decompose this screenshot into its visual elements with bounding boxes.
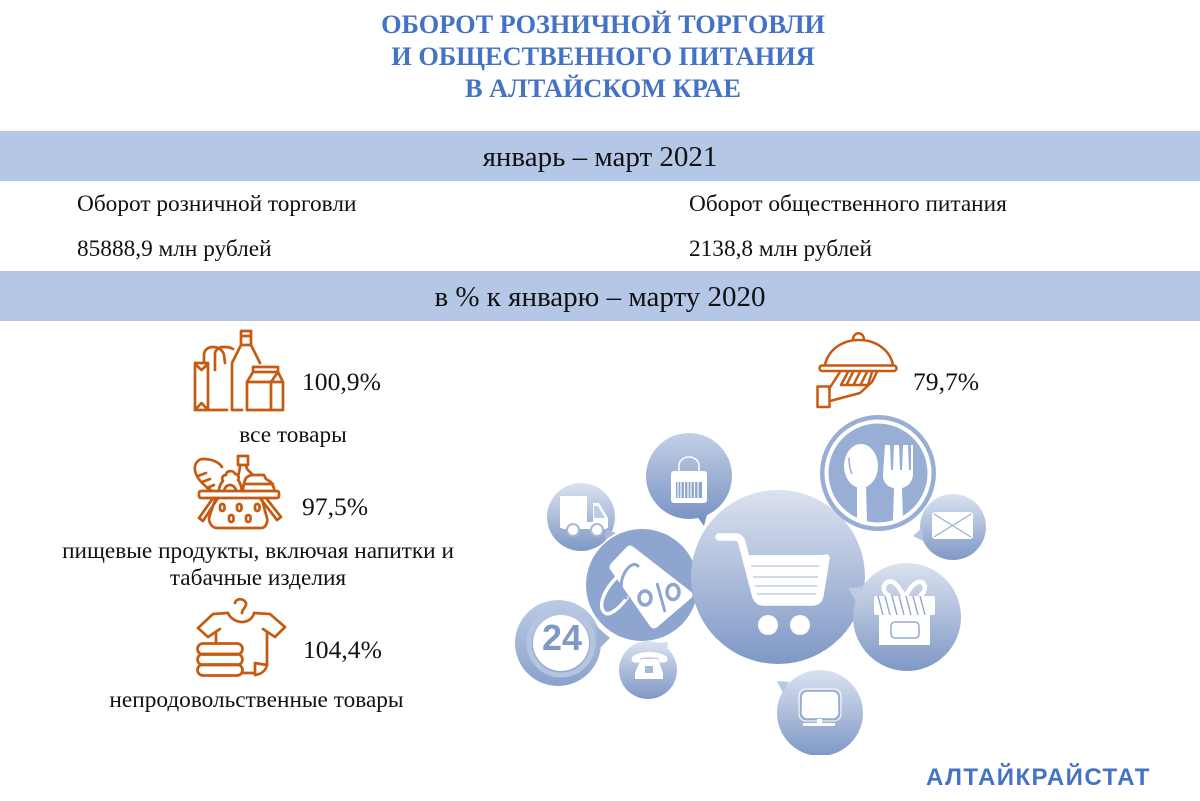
bubble: spoon and fork bbox=[820, 415, 936, 531]
bubble: gift box bbox=[848, 563, 961, 671]
text: value catering: 79,7% bbox=[913, 367, 979, 396]
bubble: 24 hours bbox=[515, 600, 610, 686]
title: В АЛТАЙСКОМ КРАЕ bbox=[465, 74, 741, 103]
text: retail label: Оборот розничной торговли bbox=[77, 191, 356, 217]
title bbox=[381, 10, 825, 103]
text: retail value: 85888,9 млн рублей bbox=[77, 236, 272, 262]
text: source: АЛТАЙКРАЙСТАТ bbox=[926, 764, 1151, 791]
bubble: envelope bbox=[913, 494, 986, 560]
text: value non-food: 104,4% bbox=[303, 635, 382, 664]
bubble: 24 hours: 24 bbox=[542, 617, 582, 658]
text: non-food label: непродовольственные товары bbox=[109, 687, 404, 713]
band: period bbox=[0, 131, 1200, 181]
text: all goods label: все товары bbox=[239, 422, 347, 448]
text: catering value: 2138,8 млн рублей bbox=[689, 236, 872, 262]
bubble: percent tag bbox=[586, 529, 698, 641]
text: food label: табачные изделия bbox=[170, 565, 346, 591]
bubble: shopping bag with barcode bbox=[646, 433, 732, 526]
title: И ОБЩЕСТВЕННОГО ПИТАНИЯ bbox=[391, 42, 815, 71]
icon: t-shirt and folded clothes bbox=[196, 598, 286, 677]
bubble: monitor bbox=[777, 670, 863, 756]
band: comparison: в % к январю – марту 2020 bbox=[434, 281, 766, 313]
icon: grocery bag, bottle, milk carton bbox=[194, 330, 284, 412]
bubble: telephone bbox=[619, 641, 677, 699]
icon: food basket bbox=[194, 454, 282, 530]
icon: cloche on hand bbox=[816, 332, 898, 408]
bubble: truck bbox=[547, 483, 616, 551]
title: ОБОРОТ РОЗНИЧНОЙ ТОРГОВЛИ bbox=[381, 10, 825, 39]
illustration: shopping bubbles bbox=[515, 415, 986, 755]
text: value food: 97,5% bbox=[302, 492, 368, 521]
text: food label: пищевые продукты, включая напитки и bbox=[62, 538, 454, 564]
bubble: shopping cart bbox=[691, 490, 865, 664]
text: food label bbox=[62, 538, 454, 591]
band: period: январь – март 2021 bbox=[483, 141, 717, 173]
band: comparison bbox=[0, 271, 1200, 321]
text: value all goods: 100,9% bbox=[302, 367, 381, 396]
text: catering label: Оборот общественного питания bbox=[689, 191, 1007, 217]
